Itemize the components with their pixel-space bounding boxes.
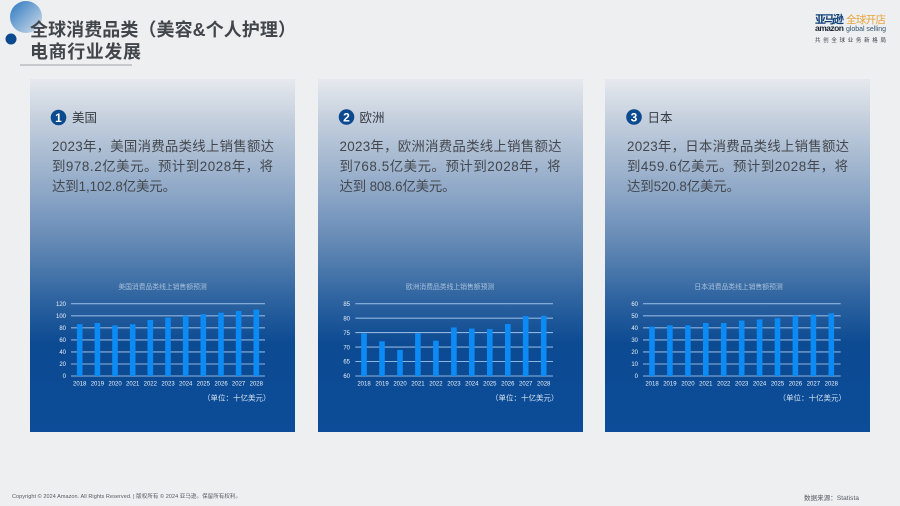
bar chart: 欧洲: 2027 [519, 382, 533, 388]
logo: amazon global selling: global selling [846, 26, 886, 33]
bar chart: 欧洲: 85 [343, 302, 351, 308]
logo: amazon global selling: 全球开店 [846, 13, 886, 26]
bar chart: 美国: 2027 [232, 382, 246, 388]
bar chart: 美国: 80 [59, 326, 67, 332]
bar chart: 欧洲: 2019 [375, 382, 389, 388]
bar chart: 日本: 2025 [771, 382, 785, 388]
text: 欧洲 summary: 到768.5亿美元。预计到2028年，将 [340, 159, 560, 174]
bar chart: 日本: 2023 [735, 382, 749, 388]
bar chart: 欧洲: 2026 [501, 382, 515, 388]
bar chart: 日本: 20 [631, 350, 639, 356]
text: 美国 summary: 到978.2亿美元。预计到2028年，将 [52, 159, 273, 174]
bar chart: 美国 [56, 302, 265, 388]
bar chart: 日本 [631, 302, 841, 388]
text: 日本 summary: 到459.6亿美元。预计到2028年，将 [627, 159, 848, 174]
bar chart: 欧洲: 60 [343, 374, 351, 380]
panel: 欧洲 [318, 79, 583, 432]
unit label: 美国: （单位：十亿美元） [203, 392, 270, 402]
unit label: 欧洲: （单位：十亿美元） [491, 392, 558, 402]
heading: 美国: 1 [55, 111, 62, 125]
bar chart: 日本: 2027 [807, 382, 821, 388]
bar chart: 美国: 40 [59, 350, 67, 356]
logo: amazon global selling: 共创全球业务新格局 [815, 36, 886, 44]
bar chart: 日本: 2022 [717, 382, 731, 388]
bar chart: 美国: 2019 [91, 382, 105, 388]
text: 欧洲 summary [340, 139, 562, 194]
bar chart: 日本: 2020 [681, 382, 695, 388]
heading: 日本: 日本 [648, 111, 673, 125]
bar chart: 日本: 2018 [645, 382, 659, 388]
bar chart: 美国: 20 [59, 362, 67, 368]
bar chart: 欧洲: 2018 [357, 382, 371, 388]
text: 美国 summary: 达到1,102.8亿美元。 [52, 179, 176, 194]
bar chart: 欧洲: 2028 [537, 382, 551, 388]
bar chart: 美国: 120 [56, 302, 67, 308]
bar chart: 美国: 2022 [144, 382, 158, 388]
bar chart: 日本: 50 [631, 314, 639, 320]
bar chart: 美国: 2023 [161, 382, 175, 388]
panel: 美国 [30, 79, 295, 432]
bar chart: 美国: 2024 [179, 382, 193, 388]
bar chart: 日本: 2028 [825, 382, 839, 388]
logo: amazon global selling [815, 12, 886, 44]
footer: copyright: Copyright © 2024 Amazon. All Rights Reserved. | 版权所有 © 2024 亚马逊。保留所有权利。 [12, 492, 241, 500]
bar chart: 欧洲 [343, 302, 553, 388]
bar chart: 欧洲: 2020 [393, 382, 407, 388]
bar chart: 美国: 100 [56, 314, 67, 320]
bar chart: 日本: 0 [635, 374, 639, 380]
bar chart: 欧洲: 2025 [483, 382, 497, 388]
bar chart: 美国: 2020 [108, 382, 122, 388]
text: 日本 summary [627, 139, 849, 194]
logo: amazon global selling: 亚马逊 [815, 12, 844, 26]
text: 日本 summary: 2023年，日本消费品类线上销售额达 [627, 139, 849, 154]
unit label: 日本: （单位：十亿美元） [778, 392, 846, 402]
heading: 美国: 美国 [72, 111, 97, 125]
chart title: 欧洲: 欧洲消费品类线上销售额预测 [406, 282, 494, 291]
bar chart: 欧洲: 2023 [447, 382, 461, 388]
heading: 日本 [626, 109, 673, 125]
bar chart: 日本: 30 [631, 338, 639, 344]
heading: 日本: 3 [631, 110, 638, 124]
text: 美国 summary [52, 139, 274, 194]
footer: data source: 数据来源：Statista [804, 493, 859, 502]
bar chart: 美国: 2028 [250, 382, 264, 388]
title: 电商行业发展 [30, 41, 141, 62]
bar chart: 日本: 2019 [663, 382, 677, 388]
text: 欧洲 summary: 2023年，欧洲消费品类线上销售额达 [340, 139, 562, 154]
bar chart: 日本: 2021 [699, 382, 713, 388]
bar chart: 日本: 10 [631, 362, 639, 368]
bar chart: 美国: 0 [63, 374, 67, 380]
bar chart: 美国: 2025 [197, 382, 211, 388]
bar chart: 欧洲: 2024 [465, 382, 479, 388]
bar chart: 欧洲: 2022 [429, 382, 443, 388]
panel: 日本 [605, 79, 870, 432]
title: 全球消费品类（美容&个人护理） [30, 19, 296, 40]
bar chart: 日本: 2026 [789, 382, 803, 388]
logo: amazon global selling: amazon [815, 23, 844, 33]
text: 欧洲 summary: 达到 808.6亿美元。 [340, 179, 456, 194]
bar chart: 日本: 40 [631, 326, 639, 332]
heading: 欧洲: 2 [343, 110, 350, 124]
bar chart: 日本: 2024 [753, 382, 767, 388]
bar chart: 欧洲: 80 [343, 316, 351, 322]
bar chart: 欧洲: 70 [343, 345, 351, 351]
bar chart: 美国: 60 [59, 338, 67, 344]
bar chart: 美国: 2026 [214, 382, 228, 388]
text: 美国 summary: 2023年，美国消费品类线上销售额达 [52, 139, 274, 154]
chart title: 美国: 美国消费品类线上销售额预测 [118, 282, 207, 291]
chart title: 日本: 日本消费品类线上销售额预测 [694, 282, 783, 291]
heading: 美国 [51, 110, 97, 125]
bar chart: 美国: 2021 [126, 382, 140, 388]
text: 日本 summary: 达到520.8亿美元。 [627, 179, 740, 194]
decorative circles [6, 1, 42, 44]
heading: 欧洲: 欧洲 [360, 111, 384, 125]
bar chart: 欧洲: 2021 [411, 382, 425, 388]
bar chart: 美国: 2018 [73, 382, 87, 388]
bar chart: 欧洲: 65 [343, 360, 351, 366]
title [30, 19, 296, 62]
bar chart: 欧洲: 75 [343, 331, 351, 337]
bar chart: 日本: 60 [631, 302, 639, 308]
heading: 欧洲 [339, 109, 384, 125]
